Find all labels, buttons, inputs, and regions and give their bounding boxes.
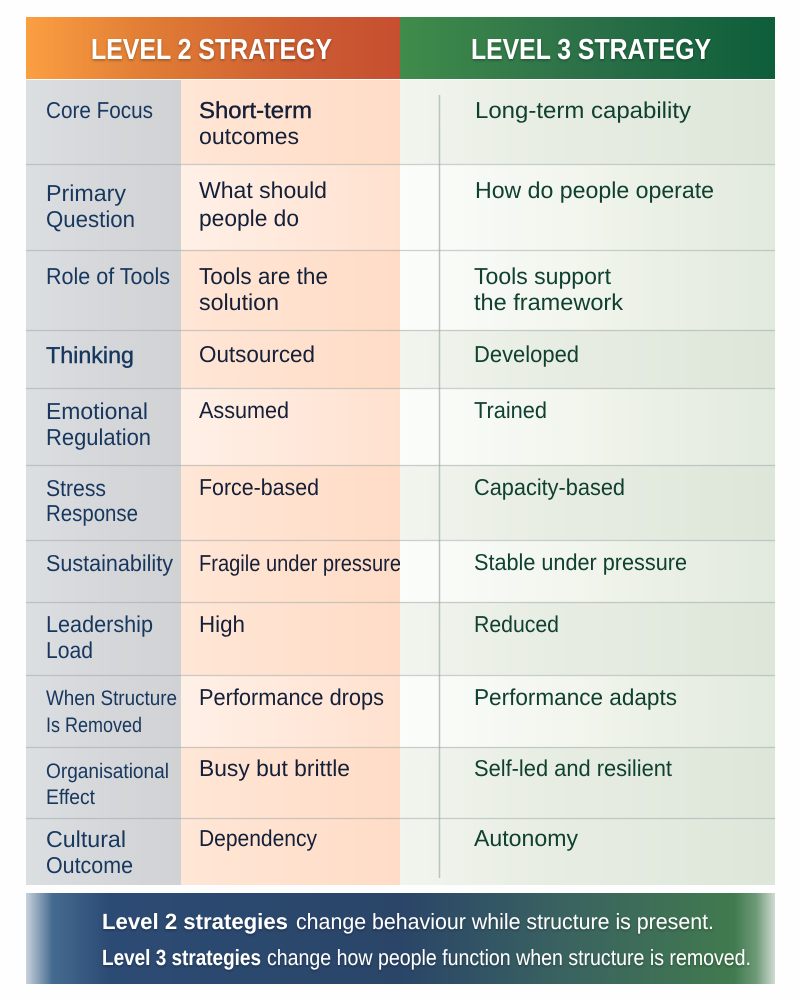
label: core focus: Core Focus — [46, 97, 153, 123]
level 3: thinking: Developed — [474, 341, 579, 367]
panel: row labels column — [26, 80, 181, 885]
label: sustainability: Sustainability — [46, 550, 173, 576]
level 2: primary question — [199, 177, 327, 231]
level 3: core focus: Long-term capability — [475, 97, 692, 123]
footer line 2 — [102, 945, 751, 970]
level 2: cultural outcome: Dependency — [199, 825, 317, 851]
footer line 1 — [102, 909, 714, 934]
level 2: emotional regulation: Assumed — [199, 397, 289, 423]
footer line 2: change how people function when structure is removed. — [267, 945, 751, 970]
level 3: primary question: How do people operate — [475, 177, 714, 203]
label: stress response: Stress — [46, 475, 106, 501]
label: organisational effect: Effect — [46, 786, 95, 809]
level 2: stress response: Force-based — [199, 474, 319, 500]
label: leadership load — [46, 611, 153, 663]
label: leadership load: Leadership — [46, 611, 153, 637]
label: organisational effect: Organisational — [46, 760, 169, 783]
level 2: role of tools: solution — [199, 289, 279, 315]
level 3: organisational effect: Self-led and resilient — [474, 755, 673, 781]
label: primary question: Question — [46, 206, 135, 232]
header: level 2 strategy: LEVEL 2 STRATEGY — [91, 34, 332, 66]
level 2: role of tools — [199, 263, 328, 315]
level 3: when structure is removed: Performance adapts — [474, 684, 677, 710]
header: level 3 strategy — [400, 17, 775, 79]
level 2: organisational effect: Busy but brittle — [199, 755, 350, 781]
level 2: thinking: Outsourced — [199, 341, 315, 367]
label: cultural outcome: Outcome — [46, 852, 133, 878]
footer line 2: Level 3 strategies — [102, 945, 261, 970]
label: cultural outcome — [46, 826, 133, 878]
label: role of tools: Role of Tools — [46, 263, 170, 289]
level 2: core focus — [199, 97, 312, 149]
label: when structure is removed: Is Removed — [46, 714, 142, 737]
level 2: when structure is removed: Performance drops — [199, 684, 384, 710]
panel: level 3 column — [400, 80, 775, 885]
level 2: leadership load: High — [199, 611, 245, 637]
level 2: sustainability: Fragile under pressure — [199, 550, 401, 576]
label: organisational effect — [46, 760, 169, 809]
label: emotional regulation: Regulation — [46, 424, 151, 450]
label: primary question: Primary — [46, 180, 126, 206]
panel: level 2 column — [181, 80, 401, 885]
footer line 1: Level 2 strategies — [102, 909, 288, 934]
label: emotional regulation — [46, 398, 151, 450]
level 3: stress response: Capacity-based — [474, 474, 625, 500]
label: stress response — [46, 475, 138, 526]
footer banner — [26, 893, 775, 984]
label: when structure is removed: When Structure — [46, 687, 177, 710]
level 2: role of tools: Tools are the — [199, 263, 328, 289]
label: when structure is removed — [46, 687, 177, 737]
level 2: core focus: outcomes — [199, 123, 299, 149]
label: primary question — [46, 180, 135, 232]
label: emotional regulation: Emotional — [46, 398, 148, 424]
level 2: core focus: Short-term — [199, 97, 312, 123]
label: leadership load: Load — [46, 637, 93, 663]
level 3: role of tools: Tools support — [474, 263, 612, 289]
level 2: primary question: people do — [199, 205, 299, 231]
level 3: emotional regulation: Trained — [474, 397, 547, 423]
level 3: role of tools — [474, 263, 624, 315]
level 3: sustainability: Stable under pressure — [474, 549, 687, 575]
header: level 2 strategy — [26, 17, 400, 79]
label: thinking: Thinking — [46, 342, 134, 368]
level 3: role of tools: the framework — [474, 289, 624, 315]
footer line 1: change behaviour while structure is present. — [296, 909, 714, 934]
level 2: primary question: What should — [199, 177, 327, 203]
label: cultural outcome: Cultural — [46, 826, 126, 852]
label: stress response: Response — [46, 500, 138, 526]
header: level 3 strategy: LEVEL 3 STRATEGY — [471, 34, 711, 66]
level 3: leadership load: Reduced — [474, 611, 559, 637]
level 3: cultural outcome: Autonomy — [474, 825, 578, 851]
